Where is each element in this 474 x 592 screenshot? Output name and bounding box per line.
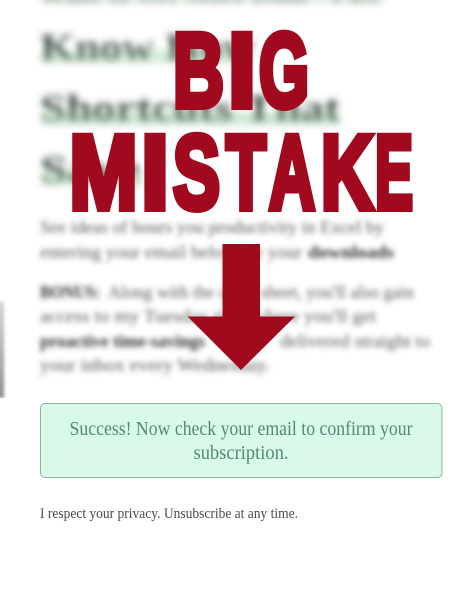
white mask below image — [0, 398, 474, 592]
blurred paragraphs: BONUS: — [40, 282, 100, 302]
blurred paragraphs — [40, 217, 430, 375]
blurred heading: Know How — [40, 27, 256, 69]
word: BIG: I — [228, 12, 256, 130]
blurred heading: Shortcuts That — [40, 88, 340, 130]
word: MISTAKE: E — [375, 114, 413, 232]
blurred paragraphs: proactive time-savings — [40, 331, 205, 351]
success text: subscription. — [194, 442, 288, 464]
word: MISTAKE: T — [226, 114, 266, 232]
privacy note: I respect your privacy. Unsubscribe at any time. — [40, 506, 298, 522]
blurred heading — [40, 0, 385, 191]
big mistake title — [70, 12, 413, 232]
blurred paragraphs: entering your email below for your — [40, 242, 302, 262]
word: MISTAKE: I — [141, 114, 169, 232]
blurred left edge strip — [0, 302, 4, 398]
word: MISTAKE: S — [173, 114, 220, 232]
word: MISTAKE: K — [321, 114, 373, 232]
blurred paragraphs: Along with the cheat sheet, you'll also gain — [108, 282, 414, 302]
arrow pointing down — [188, 244, 295, 370]
word: MISTAKE: A — [269, 114, 315, 232]
blurred heading: Save — [40, 149, 140, 191]
blurred paragraphs: your inbox every Wednesday. — [40, 355, 270, 375]
success message box — [40, 404, 442, 478]
blurred paragraphs: access to my Tuesday tips, where you'll get — [40, 306, 376, 326]
success text — [70, 418, 413, 464]
blurred paragraphs: See ideas of hours you productivity in Excel by — [40, 217, 384, 237]
blurred paragraphs: downloads — [308, 242, 394, 262]
blurred paragraphs: delivered straight to — [280, 331, 430, 351]
word: BIG: G — [259, 12, 309, 130]
word: BIG: B — [173, 12, 224, 130]
success text: Success! Now check your email to confirm your — [70, 418, 413, 440]
word: MISTAKE: M — [70, 114, 138, 232]
